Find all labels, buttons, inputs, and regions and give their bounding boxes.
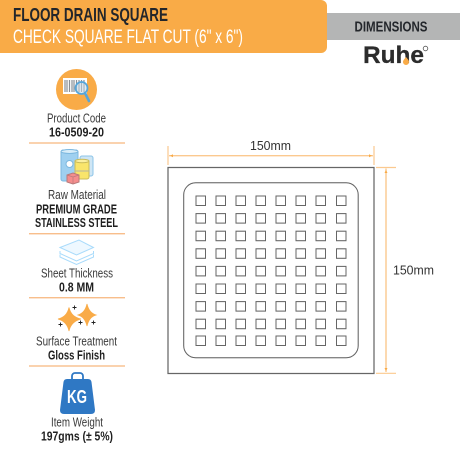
icon: material drums (61, 150, 93, 184)
spec: sheet thickness: Sheet Thickness (41, 265, 113, 280)
icon: KG weight: KG (67, 387, 87, 407)
subtitle: CHECK SQUARE FLAT CUT (6" x 6") (13, 26, 243, 48)
spec: surface treatment: Surface Treatment (36, 333, 117, 348)
outer plate (168, 168, 374, 374)
spec: raw material: Raw Material (48, 187, 106, 202)
spec: sheet thickness (41, 240, 113, 294)
spec: item weight (41, 373, 113, 444)
dimensions band (327, 13, 460, 40)
title: FLOOR DRAIN SQUARE (13, 4, 168, 25)
spec: raw material: PREMIUM GRADE (36, 202, 117, 216)
dimension: height: 150mm (393, 262, 434, 278)
spec: product code: 16-0509-20 (49, 126, 104, 140)
spec: product code (47, 69, 106, 140)
icon: stacked sheets (60, 240, 94, 264)
logo: Ruhe: Ruhe (363, 42, 424, 69)
spec: product code: Product Code (47, 111, 106, 126)
inner rounded panel (184, 183, 358, 358)
spec: surface treatment: Gloss Finish (48, 348, 105, 362)
icon: sparkles (58, 304, 96, 331)
spec: raw material: STAINLESS STEEL (35, 216, 118, 230)
drain drawing (168, 168, 374, 374)
spec: item weight: 197gms (± 5%) (41, 430, 113, 444)
square perforation grid (196, 196, 346, 346)
dimension: width: 150mm (250, 138, 291, 153)
spec: sheet thickness: 0.8 MM (59, 280, 94, 294)
dimensions band: DIMENSIONS (354, 20, 428, 36)
spec: raw material (35, 150, 118, 230)
spec: item weight: Item Weight (51, 415, 103, 430)
dimension: width (168, 138, 374, 165)
dimension: height (376, 168, 434, 373)
icon: barcode and magnifier (56, 69, 97, 110)
header banner (0, 0, 327, 53)
spec: surface treatment (36, 304, 117, 362)
